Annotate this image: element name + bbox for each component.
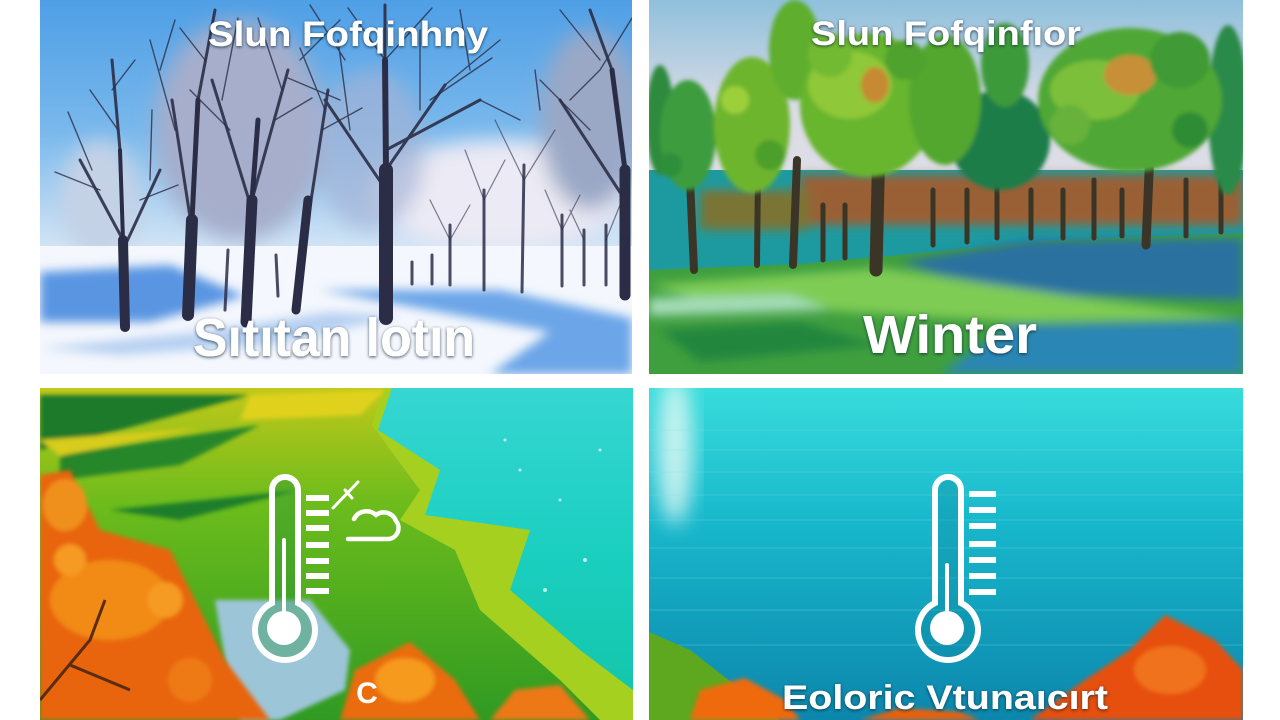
sun glare [657,375,693,525]
trunks [690,140,1221,270]
pond [215,600,350,720]
sea sparkles [504,438,602,592]
orange foliage [40,470,590,720]
foliage [646,0,1248,195]
green shore [649,632,780,720]
small glyph: C [356,677,378,710]
panel: autumn shoreline [40,388,633,720]
season label: Winter [863,305,1037,365]
panel title: Slun Fofqinfıor [811,15,1081,53]
panel: winter forest [40,0,640,374]
snow ground [40,246,632,374]
water ripples [649,430,1243,645]
icon: thermometer with weather [255,477,399,660]
snowy tree haze [60,20,640,260]
bare trees [55,5,632,327]
panel caption: Eoloric Vtunaıcırt [782,679,1108,717]
season label: Sıtıtan lotın [193,308,475,368]
panel: turquoise water [649,375,1243,720]
orange foliage [690,615,1243,720]
distant water and tree band [649,170,1243,270]
panel: green summer park [646,0,1248,374]
green land [372,388,633,720]
panel title: Slun Fofqinhny [208,15,489,54]
grass [649,233,1243,374]
icon: thermometer [918,477,996,660]
